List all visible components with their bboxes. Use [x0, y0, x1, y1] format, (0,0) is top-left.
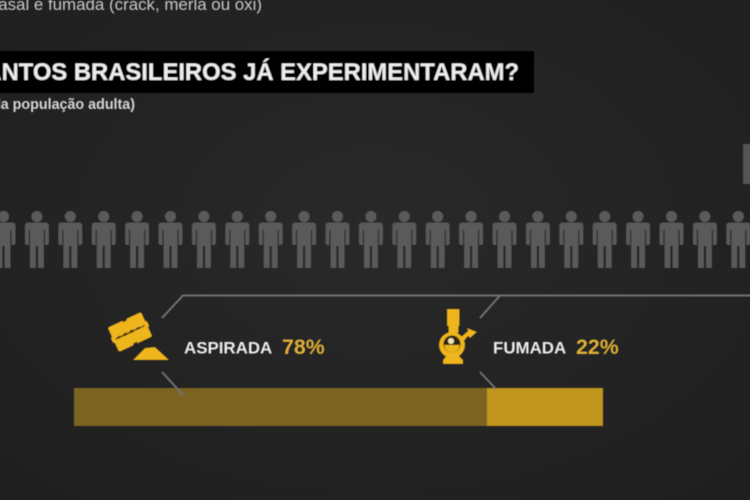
label: fumada [493, 335, 619, 359]
side tab [743, 144, 750, 184]
title banner [0, 51, 534, 93]
stacked bar: aspirada 78%, fumada 22% [74, 388, 603, 426]
label: aspirada: 78% [282, 335, 325, 359]
label: aspirada: ASPIRADA [184, 338, 272, 358]
bracket connector lines [162, 296, 750, 395]
icon: razor blade with powder [106, 311, 169, 360]
label: fumada: FUMADA [493, 338, 566, 358]
label: aspirada [184, 335, 325, 359]
row of people pictogram [0, 211, 750, 268]
label: fumada: 22% [576, 335, 619, 359]
icon: bong [439, 309, 477, 364]
